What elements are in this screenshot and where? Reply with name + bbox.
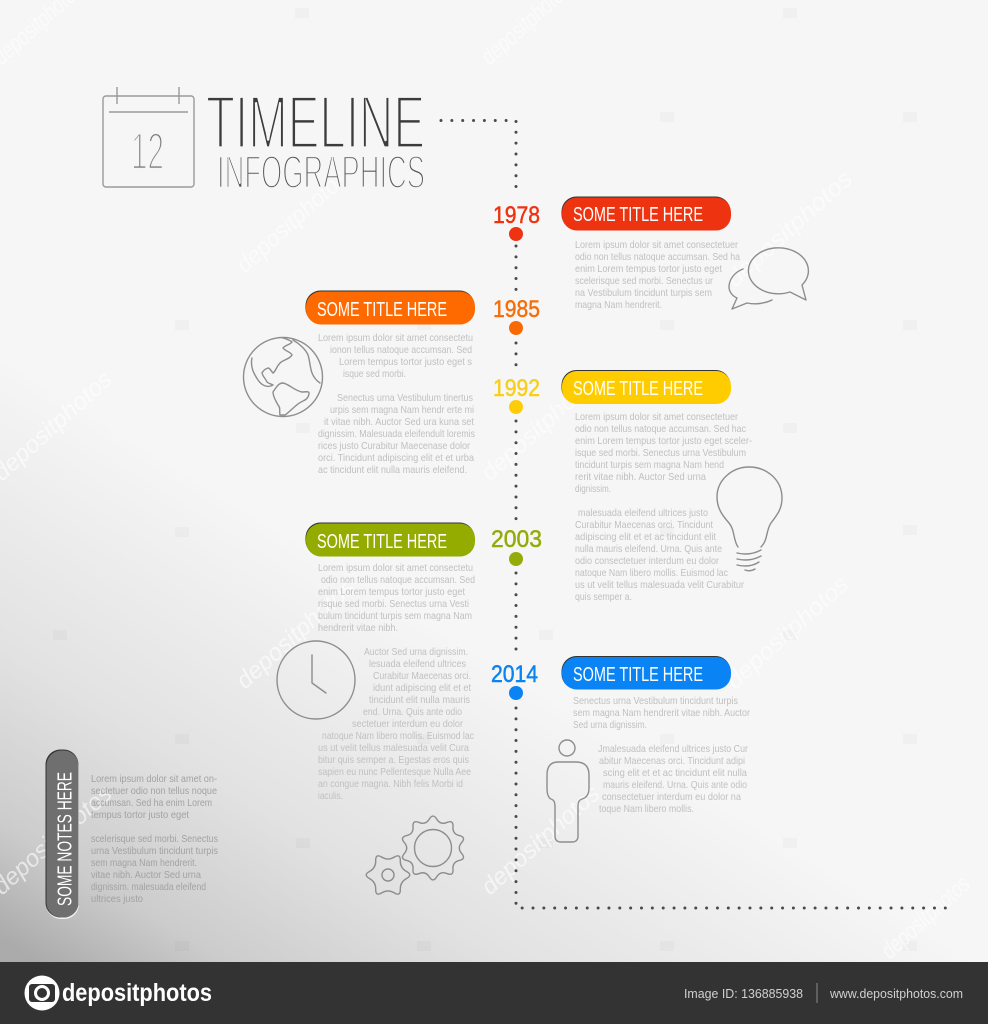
title pill: SOME TITLE HERE	[573, 204, 703, 226]
title pill	[562, 656, 731, 690]
text block: bulum tincidunt turpis sem magna Nam	[318, 610, 472, 622]
text block: us ut velit tellus malesuada velit Cura	[318, 742, 469, 754]
text block: adipiscing elit et et ac tincidunt elit	[575, 531, 716, 543]
text block: isque sed morbi. Senectus urna Vestibulum	[575, 447, 746, 459]
icon: person	[547, 740, 589, 842]
subtitle: INFOGRAPHICS	[217, 146, 425, 198]
text block: consectetuer interdum eu dolor na	[602, 791, 741, 803]
marker	[509, 400, 523, 414]
text block: odio non tellus natoque accumsan. Sed ha	[575, 251, 740, 263]
text block: ac tincidunt elit nulla mauris eleifend.	[318, 464, 467, 476]
text block: isque sed morbi.	[343, 368, 406, 380]
event 2014	[491, 656, 750, 842]
text block: Lorem ipsum dolor sit amet consectetu	[318, 332, 473, 344]
title pill	[562, 196, 731, 230]
title pill	[562, 370, 731, 404]
text block: risque sed morbi. Senectus urna Vesti	[318, 598, 469, 610]
icon: gears	[366, 809, 473, 894]
text block: bitur quis semper a. Egestas eros quis	[318, 754, 469, 766]
icon: light bulb	[717, 467, 782, 571]
title: TIMELINE	[206, 80, 425, 164]
icon: speech bubbles	[729, 248, 808, 309]
text block: odio non tellus natoque accumsan. Sed hac	[575, 423, 746, 435]
text block: Lorem ipsum dolor sit amet consectetuer	[575, 239, 738, 251]
text block	[573, 695, 750, 815]
text block: orci. Tincidunt adipiscing elit et et urba	[318, 452, 474, 464]
text block: dignissim.	[575, 483, 611, 495]
text block: quis semper a.	[575, 591, 632, 603]
marker	[509, 686, 523, 700]
text block: natoque Nam libero mollis. Euismod lac	[322, 730, 474, 742]
text block: hendrerit vitae nibh.	[318, 622, 398, 634]
text block: scelerisque sed morbi. Senectus ur	[575, 275, 713, 287]
title pill: SOME TITLE HERE	[317, 531, 447, 553]
footer logo text: depositphotos	[62, 979, 212, 1007]
text block: malesuada eleifend ultrices justo	[578, 507, 708, 519]
text block: Curabitur Maecenas orci. Tincidunt	[575, 519, 713, 531]
text block: magna Nam hendrerit.	[575, 299, 662, 311]
notes pill: SOME NOTES HERE	[54, 772, 76, 906]
text block: Lorem ipsum dolor sit amet consectetu	[318, 562, 473, 574]
text block: Lorem ipsum dolor sit amet consectetuer	[575, 411, 738, 423]
text block: tincidunt turpis sem magna Nam hend	[575, 459, 724, 471]
event 2003	[277, 522, 542, 894]
footer logo icon	[24, 976, 60, 1010]
watermark text: depositphotos	[721, 165, 858, 292]
watermark text: depositphotos	[721, 571, 854, 694]
year 1978: 1978	[493, 202, 540, 229]
title	[206, 80, 425, 198]
text block: Senectus urna Vestibulum tincidunt turpis	[573, 695, 738, 707]
text block: idunt adipiscing elit et et	[373, 682, 471, 694]
notes text: ultrices justo	[91, 893, 143, 905]
icon: globe	[244, 338, 322, 416]
text block: end. Urna. Quis ante odio	[363, 706, 462, 718]
title pill	[306, 522, 475, 556]
text block: Lorem tempus tortor justo eget s	[339, 356, 472, 368]
text block: rices justo Curabitur Maecenase dolor	[318, 440, 470, 452]
text block: iaculis.	[318, 790, 343, 802]
footer bar	[0, 962, 988, 1024]
notes text: Lorem ipsum dolor sit amet on-	[91, 773, 217, 785]
text block: odio consectetuer interdum eu dolor	[575, 555, 719, 567]
text block: sem magna Nam hendrerit vitae nibh. Auctor	[573, 707, 750, 719]
icon: clock	[277, 641, 355, 719]
text block	[318, 562, 475, 802]
notes text: accumsan. Sed ha enim Lorem	[91, 797, 212, 809]
text block: abitur Maecenas orci. Tincidunt adipi	[599, 755, 745, 767]
text block: Sed urna dignissim.	[573, 719, 647, 731]
text block: urpis sem magna Nam hendr erte mi	[330, 404, 474, 416]
watermark text: depositphotos	[231, 165, 353, 278]
text block: mauris eleifend. Urna. Quis ante odio	[603, 779, 747, 791]
website: www.depositphotos.com	[829, 987, 963, 1001]
text block: Senectus urna Vestibulum tinertus	[337, 392, 473, 404]
text block: ionon tellus natoque accumsan. Sed	[330, 344, 472, 356]
text block: na Vestibulum tincidunt turpis sem	[575, 287, 712, 299]
text block: toque Nam libero mollis.	[599, 803, 694, 815]
text block: nulla mauris eleifend. Urna. Quis ante	[575, 543, 722, 555]
notes text: dignissim. malesuada eleifend	[91, 881, 206, 893]
text block: Auctor Sed urna dignissim.	[364, 646, 468, 658]
event 1985	[244, 290, 540, 476]
text block: tincidunt elit nulla mauris	[369, 694, 470, 706]
marker	[509, 321, 523, 335]
year 2003: 2003	[491, 526, 542, 553]
year 1992: 1992	[493, 375, 540, 402]
title pill: SOME TITLE HERE	[573, 664, 703, 686]
text block: enim Lorem tempus tortor justo eget	[318, 586, 465, 598]
text block: enim Lorem tempus tortor justo eget	[575, 263, 722, 275]
text block: Curabitur Maecenas orci.	[373, 670, 471, 682]
text block: natoque Nam libero mollis. Euismod lac	[575, 567, 728, 579]
marker	[509, 552, 523, 566]
notes text: sem magna Nam hendrerit.	[91, 857, 197, 869]
notes text: sectetuer odio non tellus noque	[91, 785, 217, 797]
text block: sapien eu nunc Pellentesque Nulla Aee	[318, 766, 471, 778]
text block: it vitae nibh. Auctor Sed ura kuna set	[324, 416, 474, 428]
text block: Jmalesuada eleifend ultrices justo Cur	[598, 743, 748, 755]
year 1985: 1985	[493, 296, 540, 323]
title pill: SOME TITLE HERE	[317, 299, 447, 321]
year 2014: 2014	[491, 661, 538, 688]
notes text: tempus tortor justo eget	[91, 809, 189, 821]
watermark text: depositphotos	[231, 574, 360, 694]
notes text: vitae nibh. Auctor Sed urna	[91, 869, 201, 881]
watermark text: depositphotos	[476, 780, 605, 900]
notes panel	[46, 750, 218, 919]
timeline dotted line	[441, 120, 947, 908]
text block: lesuada eleifend ultrices	[369, 658, 466, 670]
image id: Image ID: 136885938	[684, 987, 803, 1001]
calendar number: 12	[131, 123, 164, 181]
text block: us ut velit tellus malesuada velit Curabitur	[575, 579, 744, 591]
text block: dignissim. Malesuada eleifendult loremis	[318, 428, 475, 440]
notes text	[91, 773, 218, 905]
text block: an congue magna. Nibh felis Morbi id	[318, 778, 463, 790]
notes pill	[46, 750, 79, 919]
title pill: SOME TITLE HERE	[573, 378, 703, 400]
event 1992	[493, 370, 782, 603]
text block	[575, 411, 752, 603]
text block	[575, 239, 740, 311]
text block: odio non tellus natoque accumsan. Sed	[321, 574, 475, 586]
text block: rerit vitae nibh. Auctor Sed urna	[575, 471, 706, 483]
title pill	[306, 290, 475, 324]
text block: sectetuer interdum eu dolor	[352, 718, 463, 730]
watermark text: depositphotos	[476, 366, 605, 486]
text block: scing elit et et ac tincidunt elit nulla	[603, 767, 747, 779]
text block: enim Lorem tempus tortor justo eget sceler-	[575, 435, 752, 447]
notes text: scelerisque sed morbi. Senectus	[91, 833, 218, 845]
event 1978	[493, 196, 808, 311]
marker	[509, 227, 523, 241]
icon: calendar	[103, 87, 194, 187]
notes text: urna Vestibulum tincidunt turpis	[91, 845, 218, 857]
text block	[318, 332, 475, 476]
